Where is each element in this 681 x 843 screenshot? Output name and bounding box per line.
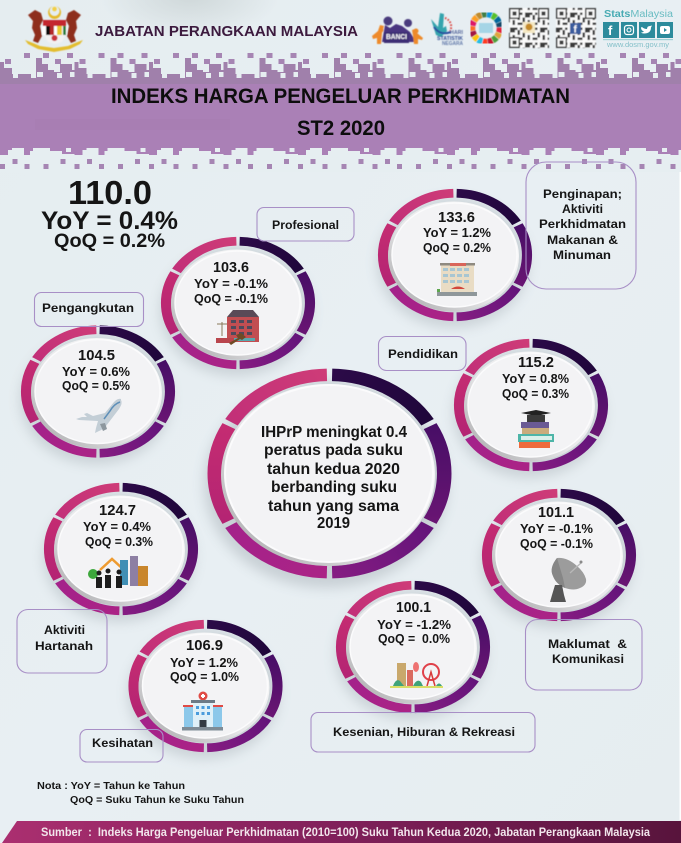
panel: Kesenian: YoY = -1.2% [377,618,451,632]
icon: Hari Statistik Negara logo: NEGARA [442,41,463,47]
label: Penginapan: Penginapan; [543,187,622,201]
label: Profesional [257,208,354,241]
panel: Maklumat: QoQ = -0.1% [520,537,593,551]
icon: hotel [437,263,477,296]
panel: Kesenian: 100.1 [396,599,431,616]
title line 1: INDEKS HARGA PENGELUAR PERKHIDMATAN [111,85,570,108]
icon: SDG wheel [472,14,500,42]
icon: amusement park [390,662,443,688]
icon: QR code with Facebook mark [556,8,596,48]
note: abbreviations: QoQ = Suku Tahun ke Suku Tahun [70,794,244,806]
icon: Hari Statistik Negara logo [431,13,464,47]
label: Profesional: Profesional [272,218,339,232]
label: Maklumat: Komunikasi [552,652,624,666]
label: Maklumat [526,620,642,690]
icon: QR code with Facebook mark: f [574,24,578,36]
panel: Pendidikan [453,343,605,478]
StatsMalaysia social block: f [608,23,613,38]
panel: central message [204,375,448,588]
panel: Maklumat [481,493,633,628]
panel: Penginapan: QoQ = 0.2% [423,241,491,255]
StatsMalaysia social block: StatsMalaysia [604,9,673,20]
panel: Kesihatan: 106.9 [186,637,223,654]
panel: Pengangkutan: 104.5 [78,347,115,364]
label: Penginapan [526,162,636,289]
label: Kesenian [311,712,535,752]
icon: Hari Statistik Negara logo: STATISTIK [437,36,463,42]
panel: Penginapan [377,193,529,328]
panel: Kesenian: QoQ = 0.0% [378,632,450,646]
label: Penginapan: Minuman [553,248,611,262]
panel: Penginapan: YoY = 1.2% [423,226,491,240]
note: abbreviations [37,780,244,806]
label: Penginapan: Makanan & [547,233,618,247]
label: Aktiviti Hartanah: Hartanah [35,639,93,653]
panel: Maklumat: YoY = -0.1% [520,522,593,536]
label: Aktiviti Hartanah: Aktiviti [44,623,85,637]
icon: Banci Malaysia logo [372,16,423,44]
panel: Aktiviti Hartanah: QoQ = 0.3% [85,535,153,549]
footer: source [2,821,681,843]
panel: Pendidikan: 115.2 [518,354,554,371]
panel: Kesenian [335,585,487,720]
label: Pengangkutan: Pengangkutan [42,301,134,315]
panel: central message: tahun kedua 2020 [267,461,400,478]
overall index summary [41,174,178,252]
panel: central message: IHPrP meningkat 0.4 [261,424,407,441]
label: Pendidikan [378,336,466,370]
overall index summary: QoQ = 0.2% [54,231,165,252]
label: Pendidikan: Pendidikan [388,347,458,361]
icon: aeroplane [76,399,122,433]
panel: central message: peratus pada suku [264,442,403,459]
panel: Pengangkutan [20,330,172,464]
title line 2: ST2 2020 [297,117,385,140]
panel: Profesional: QoQ = -0.1% [194,292,268,306]
icon: Hari Statistik Negara logo: HARI [450,30,464,36]
panel: Aktiviti Hartanah: YoY = 0.4% [83,520,151,534]
panel: Kesihatan [128,624,280,759]
icon: coat of arms of Malaysia [25,6,83,52]
label: Pengangkutan [34,292,144,326]
panel: Penginapan: 133.6 [438,209,475,226]
panel: Aktiviti Hartanah: 124.7 [99,502,136,519]
panel: Maklumat: 101.1 [538,504,574,521]
icon: Banci Malaysia logo: BANCI [386,34,407,41]
panel: Pengangkutan: QoQ = 0.5% [62,379,130,393]
panel: Kesihatan: QoQ = 1.0% [170,670,239,684]
icon: hospital [182,692,223,730]
panel: Profesional [160,241,312,376]
panel: central message: 2019 [317,515,350,532]
icon: QR code with crest [509,8,549,48]
icon: real estate [88,556,148,588]
label: Kesihatan: Kesihatan [92,736,153,750]
icon: satellite dish [550,558,586,602]
overall index summary: YoY = 0.4% [41,207,178,235]
panel: Profesional: YoY = -0.1% [194,277,268,291]
label: Aktiviti Hartanah [17,610,107,673]
panel: central message: tahun yang sama [268,498,399,515]
panel: Pendidikan: QoQ = 0.3% [502,387,569,401]
label: Kesihatan [80,730,163,762]
StatsMalaysia social block [603,9,673,49]
label: Penginapan: Perkhidmatan [539,217,626,231]
panel: Aktiviti Hartanah [43,487,195,622]
icon: law firm building [216,310,259,345]
panel: Kesihatan: YoY = 1.2% [170,656,238,670]
StatsMalaysia social block: www.dosm.gov.my [606,40,669,49]
label: Kesenian: Kesenian, Hiburan & Rekreasi [333,725,515,739]
footer: source: Sumber : Indeks Harga Pengeluar Perkhidmatan (2010=100) Suku Tahun Kedua 2020, Jabatan Perangkaan Malaysia [41,827,651,839]
note: abbreviations: Nota : YoY = Tahun ke Tahun [37,780,185,792]
icon: graduation cap on books [518,410,554,448]
panel: Pendidikan: YoY = 0.8% [502,372,569,386]
label: Maklumat: Maklumat & [548,637,627,651]
heading: department name: JABATAN PERANGKAAN MALAYSIA [95,23,358,40]
overall index summary: 110.0 [68,174,152,211]
label: Penginapan: Aktiviti [562,202,603,216]
panel: Profesional: 103.6 [213,259,249,276]
panel: Pengangkutan: YoY = 0.6% [62,365,130,379]
title banner [0,52,681,172]
panel: central message: berbanding suku [271,479,397,496]
